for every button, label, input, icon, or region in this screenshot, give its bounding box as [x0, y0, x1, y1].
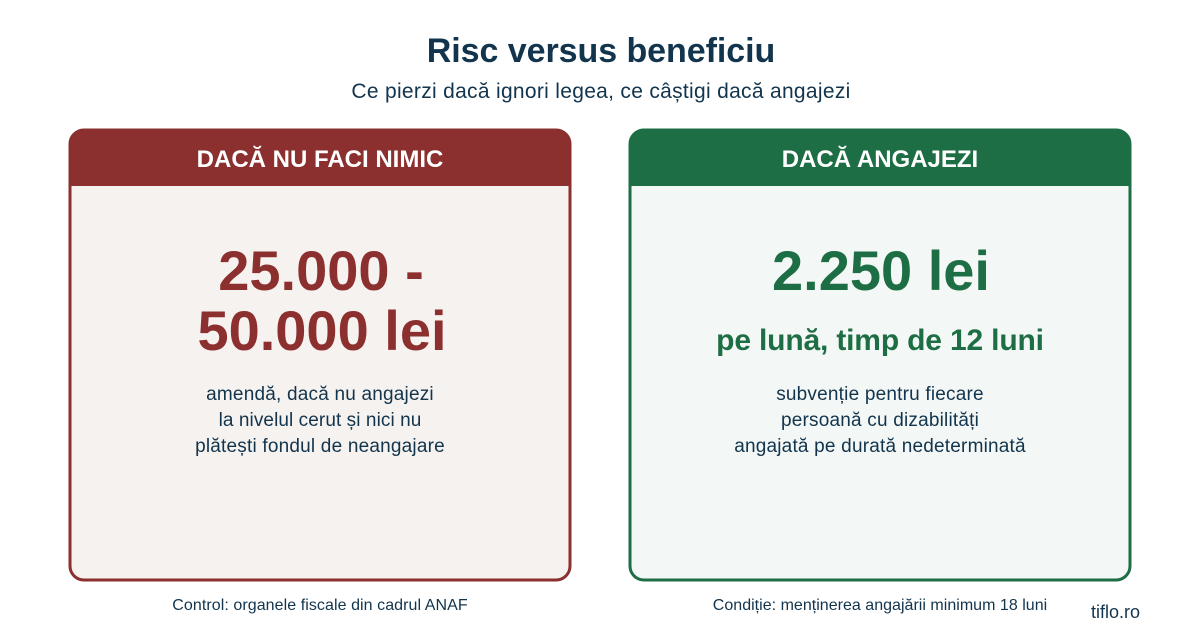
risk card background	[70, 130, 570, 580]
risk amount line 2: 50.000 lei	[197, 299, 447, 362]
subtitle: Ce pierzi dacă ignori legea, ce câștigi dacă angajezi	[351, 80, 851, 103]
benefit amount: 2.250 lei	[772, 239, 990, 302]
benefit description: persoană cu dizabilități	[781, 410, 979, 431]
benefit header label: DACĂ ANGAJEZI	[782, 146, 978, 173]
risk description	[195, 384, 445, 457]
risk header band	[70, 130, 570, 186]
benefit description: angajată pe durată nedeterminată	[734, 436, 1026, 457]
benefit period: pe lună, timp de 12 luni	[716, 324, 1044, 357]
risk description: amendă, dacă nu angajezi	[206, 384, 434, 405]
benefit description	[734, 384, 1026, 457]
benefit description: subvenție pentru fiecare	[776, 384, 984, 405]
benefit card background	[630, 130, 1130, 580]
risk description: plătești fondul de neangajare	[195, 436, 445, 457]
benefit footnote: Condiție: menținerea angajării minimum 18 luni	[713, 597, 1047, 614]
title: Risc versus beneficiu	[427, 32, 775, 70]
risk header label: DACĂ NU FACI NIMIC	[197, 146, 443, 173]
risk footnote: Control: organele fiscale din cadrul ANAF	[172, 597, 468, 614]
risk amount line 1: 25.000 -	[218, 239, 424, 302]
risk description: la nivelul cerut și nici nu	[219, 410, 421, 431]
benefit header band	[630, 130, 1130, 186]
brand: tiflo.ro	[1091, 602, 1140, 622]
